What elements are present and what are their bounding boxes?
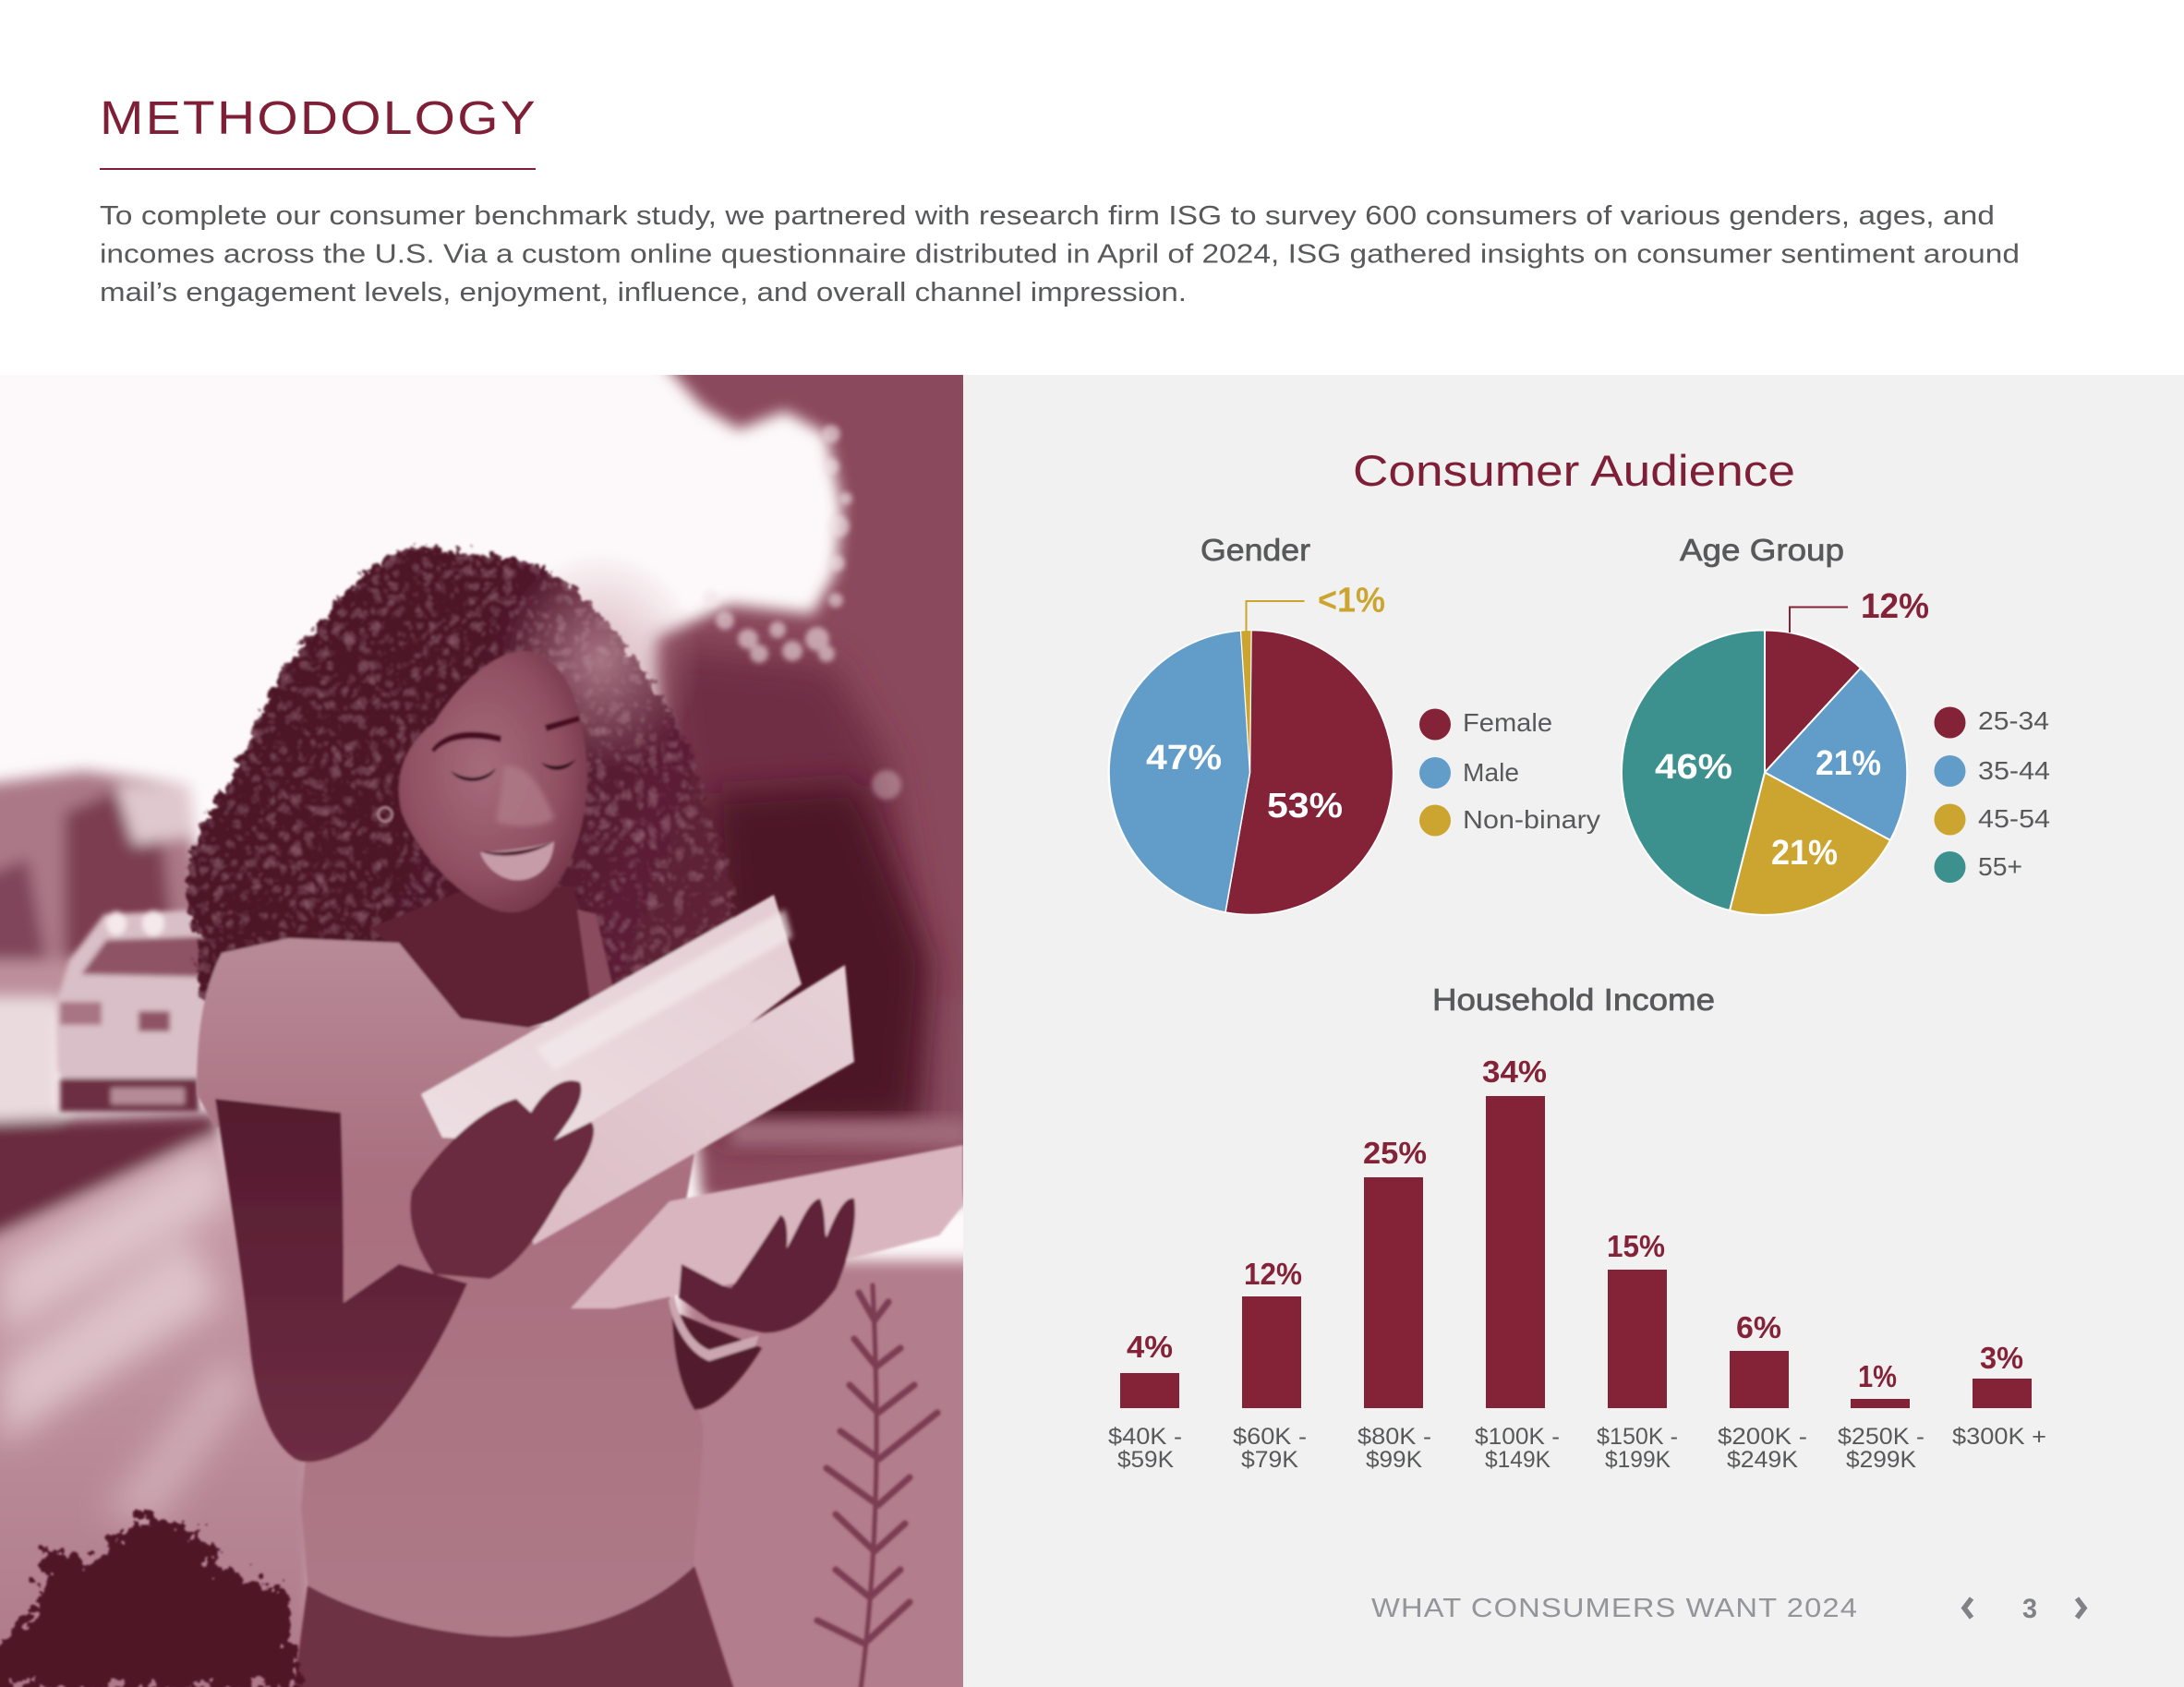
photo: facial features [379, 716, 580, 880]
photo: parked car [55, 910, 208, 1112]
intro paragraph [100, 201, 2020, 307]
photo: back letter [421, 895, 802, 1145]
slice: female 53% [1225, 630, 1394, 914]
title rule [100, 168, 536, 170]
intro paragraph: incomes across the U.S. Via a custom online questionnaire distributed in April of 2024, ISG gathered insights on consumer sentiment around [100, 240, 2020, 270]
photo: lips [480, 841, 554, 880]
bars [1120, 1096, 2032, 1408]
photo: earring [379, 807, 392, 822]
photo: pavement light streaks [0, 1145, 254, 1524]
photo: t-shirt [197, 938, 704, 1636]
panel: duotone photo of a woman reading mail [0, 360, 979, 1687]
value: 47%: 47% [1146, 739, 1222, 777]
photo: left brow [431, 731, 501, 753]
photo: woman [182, 545, 963, 1687]
value: 21% on blue: 21% [1816, 744, 1881, 783]
legend: age group: 35-44 [1978, 756, 2050, 785]
heading: gender: Gender [1201, 533, 1310, 567]
photo: face [399, 651, 587, 912]
bar values: 25% [1363, 1136, 1427, 1170]
intro paragraph: mail’s engagement levels, enjoyment, influence, and overall channel impression. [100, 278, 1187, 307]
slice: 25-34 12% [1765, 630, 1861, 772]
axis labels: $80K - [1357, 1424, 1431, 1450]
axis labels: $149K [1485, 1447, 1551, 1473]
callout: age 25-34 12% [1790, 587, 1929, 633]
bar values: 1% [1858, 1359, 1897, 1393]
heading: consumer audience: Consumer Audience [1353, 446, 1795, 495]
bar values: 4% [1127, 1330, 1173, 1364]
slice: 35-44 21% [1765, 669, 1907, 840]
callout: age 25-34 12%: 12% [1861, 587, 1929, 626]
bar values: 15% [1607, 1229, 1665, 1263]
photo: hair base [381, 886, 589, 944]
photo: blurred background trees and road [0, 360, 979, 1687]
photo: lower hand [679, 1199, 855, 1332]
callout: non-binary under 1% [1247, 582, 1385, 632]
legend: age group [1934, 706, 2050, 883]
photo: nose highlight [496, 765, 554, 826]
photo: far forearm [672, 1311, 762, 1410]
photo: letter fold shading [536, 910, 792, 1071]
photo: front letter [510, 965, 854, 1245]
slice: male 47% [1109, 631, 1250, 912]
photo: raised hand [410, 1080, 594, 1279]
photo: sunlit hair flare [506, 563, 691, 764]
value: 21% on gold: 21% [1771, 834, 1838, 873]
photo: mid-tone foliage [658, 646, 923, 1136]
intro paragraph: To complete our consumer benchmark study, we partnered with research firm ISG to survey 600 consumers of various genders, ages, and [100, 201, 1995, 231]
heading: age group: Age Group [1680, 533, 1844, 567]
slice: 45-54 21% [1730, 772, 1890, 915]
legend: gender: Female [1463, 708, 1552, 737]
axis labels: $150K - [1597, 1424, 1678, 1450]
legend: age group: 55+ [1978, 852, 2022, 881]
value: 46%: 46% [1655, 748, 1732, 787]
photo: dark foliage [711, 785, 928, 1131]
axis labels: $300K + [1952, 1424, 2046, 1450]
axis labels: $250K - [1838, 1424, 1925, 1450]
axis labels: $100K - [1475, 1424, 1560, 1450]
title: METHODOLOGY [100, 91, 537, 144]
photo: trousers [294, 1566, 734, 1687]
photo: hair curls [182, 545, 730, 1011]
axis labels: $60K - [1233, 1424, 1307, 1450]
photo: watch [669, 1295, 759, 1361]
callout: non-binary under 1%: <1% [1318, 582, 1385, 621]
bar values: 6% [1736, 1310, 1781, 1344]
photo: mouth line [480, 841, 554, 856]
photo: lower envelope [571, 1145, 963, 1308]
photo: neck and chest [369, 886, 611, 1028]
axis labels [1108, 1424, 2046, 1473]
slice: 55+ 46% [1622, 630, 1765, 910]
legend: age group: 45-54 [1978, 804, 2050, 833]
axis labels: $299K [1846, 1447, 1916, 1473]
legend: age group: 25-34 [1978, 706, 2049, 735]
icon: previous page chevron [1964, 1598, 1972, 1618]
axis labels: $249K [1727, 1447, 1798, 1473]
axis labels: $79K [1241, 1447, 1298, 1473]
bar values: 3% [1980, 1341, 2023, 1375]
axis labels: $199K [1605, 1447, 1671, 1473]
page number: 3 [2022, 1594, 2037, 1624]
legend: gender: Non-binary [1463, 805, 1600, 834]
axis labels: $200K - [1718, 1424, 1807, 1450]
icon: next page chevron [2077, 1598, 2084, 1618]
value: 53%: 53% [1267, 787, 1343, 825]
axis labels: $59K [1117, 1447, 1174, 1473]
axis labels: $40K - [1108, 1424, 1182, 1450]
bar values [1127, 1054, 2023, 1393]
legend: gender [1419, 708, 1600, 837]
bar chart: household income [1108, 1054, 2046, 1473]
photo: plant [817, 1285, 937, 1687]
bar values: 12% [1244, 1257, 1302, 1291]
photo: strap detail [577, 910, 614, 1006]
photo: left eye [451, 768, 496, 781]
pie chart: age group [1622, 630, 1908, 916]
footer: report name: WHAT CONSUMERS WANT 2024 [1371, 1594, 1858, 1623]
slice: non-binary under 1% [1241, 630, 1251, 772]
panel: consumer audience background [963, 375, 2184, 1687]
pie chart: gender [1108, 630, 1394, 915]
bar values: 34% [1482, 1054, 1547, 1089]
heading: household income: Household Income [1432, 982, 1715, 1017]
photo: bush [0, 1514, 300, 1687]
photo: right eye [541, 759, 576, 770]
photo: light strip behind letters [730, 1119, 970, 1147]
axis labels: $99K [1366, 1447, 1422, 1473]
photo: bokeh highlights [703, 425, 901, 800]
photo: arm [215, 1099, 467, 1462]
photo: right brow [545, 716, 580, 731]
legend: gender: Male [1463, 758, 1519, 787]
